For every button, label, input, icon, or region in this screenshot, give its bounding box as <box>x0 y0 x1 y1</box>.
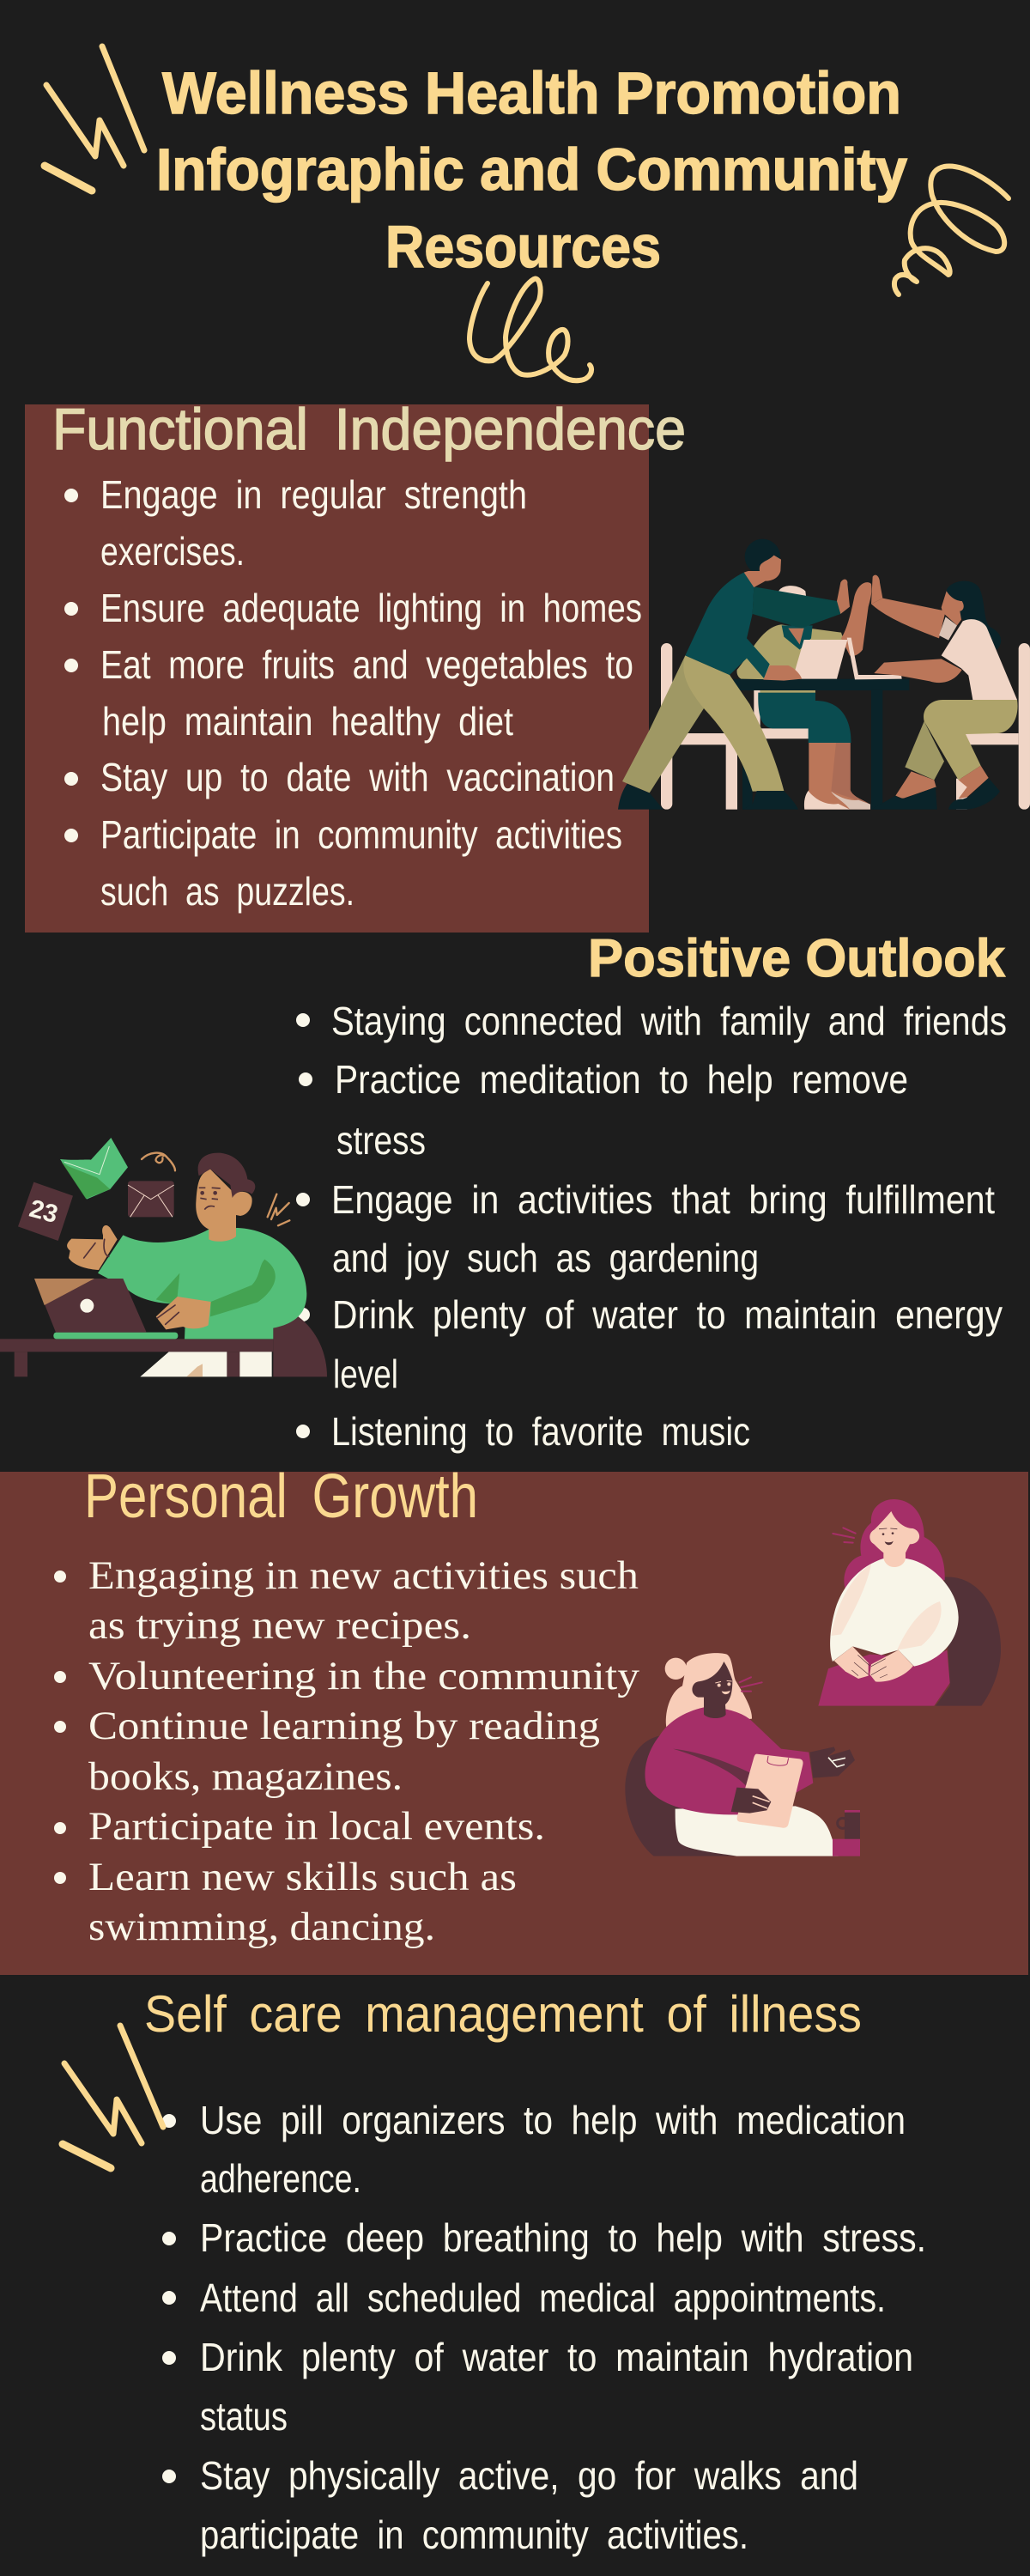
list: self care items <box>162 2098 926 2557</box>
illustration: three people high-fiving at a table <box>618 539 1030 810</box>
list: self care items: Stay physically active, go for walks and <box>200 2453 858 2498</box>
list: personal growth items <box>54 1553 640 1949</box>
list: positive outlook items: Practice meditation to help remove <box>335 1057 908 1102</box>
upper woman <box>818 1499 1001 1706</box>
panel: self care management of illness <box>144 1985 926 2557</box>
heading: personal growth: Personal Growth <box>84 1462 478 1531</box>
desk and chair <box>0 1316 327 1376</box>
list: functional independence items: Participate in community activities <box>100 812 622 857</box>
list: self care items: status <box>200 2394 288 2439</box>
list: personal growth items: Volunteering in the community <box>88 1654 640 1698</box>
illustration: stressed man at a laptop with floating calendar and envelopes <box>0 1138 327 1376</box>
icon: squiggle doodle centre <box>470 279 591 380</box>
torso <box>98 1228 306 1339</box>
icon: calendar <box>18 1182 73 1241</box>
panel: personal growth <box>0 1462 1028 1975</box>
man <box>618 539 850 810</box>
list: functional independence items: Engage in regular strength <box>100 472 527 517</box>
title: Resources <box>385 214 661 280</box>
list: positive outlook items: and joy such as gardening <box>332 1236 759 1280</box>
list: self care items: participate in community activities. <box>200 2512 748 2557</box>
list: personal growth items: swimming, dancing. <box>88 1905 435 1949</box>
icon: calendar: 23 <box>27 1194 61 1229</box>
icon: squiggle doodle right <box>894 167 1009 295</box>
icon: dark envelope <box>128 1181 174 1217</box>
table <box>734 679 909 810</box>
title <box>156 60 907 280</box>
illustration: two seated women in conversation <box>625 1499 1001 1856</box>
list: personal growth items: Learn new skills such as <box>88 1855 517 1899</box>
list: self care items: Practice deep breathing to help with stress. <box>200 2215 926 2260</box>
list: functional independence items: exercises. <box>100 529 245 574</box>
list: positive outlook items: stress <box>336 1118 426 1163</box>
list: personal growth items: books, magazines. <box>88 1754 403 1799</box>
list: self care items: Drink plenty of water to maintain hydration <box>200 2335 913 2379</box>
legs <box>140 1352 272 1376</box>
list: personal growth items: Engaging in new activities such <box>88 1553 639 1598</box>
head <box>196 1153 255 1242</box>
list: functional independence items <box>64 472 642 914</box>
icon: zigzag doodle bottom left <box>63 2026 163 2168</box>
heading: positive outlook: Positive Outlook <box>588 929 1006 988</box>
laptops <box>792 638 902 679</box>
icon: spark marks <box>268 1194 289 1225</box>
icon: zigzag doodle top left <box>45 46 144 191</box>
hands <box>67 1225 211 1329</box>
list: self care items: Attend all scheduled medical appointments. <box>200 2275 886 2320</box>
list: self care items: adherence. <box>200 2156 361 2201</box>
list: positive outlook items <box>296 999 1007 1454</box>
list: positive outlook items: Listening to favorite music <box>331 1409 750 1454</box>
list: self care items: Use pill organizers to help with medication <box>200 2098 906 2142</box>
list: personal growth items: Continue learning by reading <box>88 1704 600 1748</box>
heading: functional independence: Functional Independence <box>52 397 686 462</box>
list: personal growth items: Participate in local events. <box>88 1804 545 1849</box>
list: functional independence items: such as puzzles. <box>100 869 354 914</box>
woman on the right <box>871 575 1018 810</box>
mug on a table <box>833 1810 860 1856</box>
list: functional independence items: Stay up to date with vaccination <box>100 755 615 799</box>
laptop <box>34 1279 178 1339</box>
lower woman <box>625 1653 855 1856</box>
icon: orange squiggle <box>142 1153 175 1170</box>
list: positive outlook items: level <box>333 1352 398 1396</box>
centre person <box>737 582 871 810</box>
list: functional independence items: Eat more fruits and vegetables to <box>100 642 633 687</box>
heading: self care management of illness: Self care management of illness <box>144 1985 862 2043</box>
list: personal growth items: as trying new recipes. <box>88 1603 471 1648</box>
title: Infographic and Community <box>156 137 907 203</box>
icon: green envelope <box>60 1138 128 1200</box>
panel: functional independence <box>25 397 686 933</box>
title: Wellness Health Promotion <box>162 60 901 126</box>
chairs <box>661 643 1030 810</box>
panel: positive outlook <box>296 929 1007 1454</box>
list: functional independence items: help maintain healthy diet <box>102 699 513 744</box>
list: functional independence items: Ensure adequate lighting in homes <box>100 586 642 630</box>
